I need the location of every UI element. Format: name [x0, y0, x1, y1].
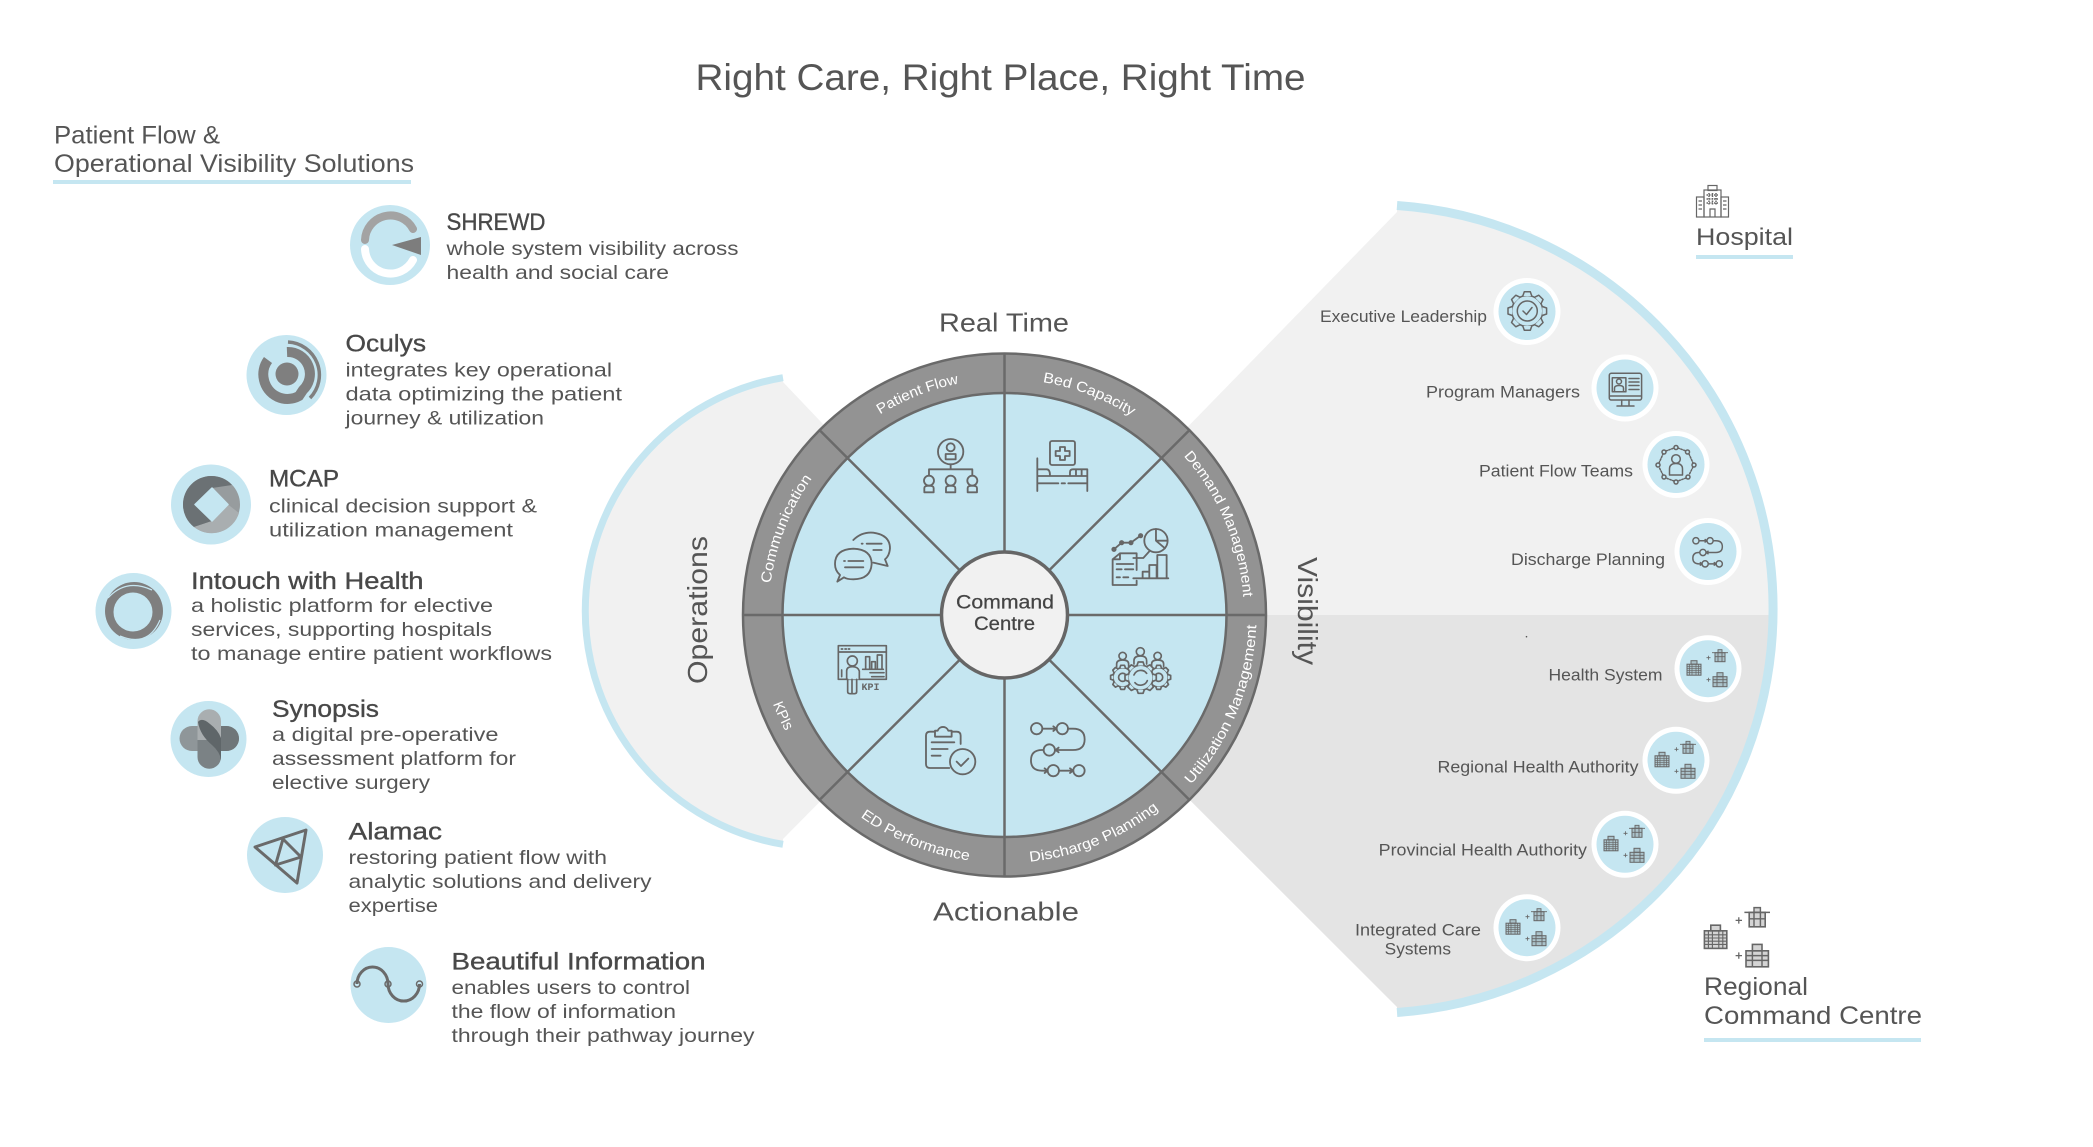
role: patient flow teams	[1479, 431, 1710, 498]
role: patient flow teams: Patient Flow Teams	[1479, 462, 1633, 481]
solution: Intouch with Health: services, supporting hospitals	[191, 619, 492, 641]
wheel: command centre	[742, 352, 1268, 878]
visibility arc	[1397, 206, 1773, 1012]
role: integrated care systems	[1355, 894, 1560, 961]
legend: regional command centre	[1704, 908, 1922, 1042]
solution: MCAP: MCAP	[269, 466, 339, 492]
segment label: discharge planning: Discharge Planning	[1030, 804, 1159, 862]
icon: hospital bed	[1037, 441, 1087, 491]
solution: MCAP	[171, 464, 537, 544]
solution: SHREWD: SHREWD	[446, 209, 546, 236]
role: provincial health authority	[1379, 811, 1658, 878]
segment label: bed capacity: Bed Capacity	[1044, 372, 1136, 416]
solution: Alamac: analytic solutions and delivery	[348, 871, 652, 893]
role: program managers: Program Managers	[1426, 383, 1580, 402]
role: program managers	[1426, 354, 1658, 422]
role: executive leadership	[1320, 278, 1560, 345]
solution: Intouch with Health	[96, 568, 552, 665]
segment label: communication: Communication	[761, 476, 812, 582]
solution: Beautiful Information: the flow of information	[452, 1001, 676, 1023]
role: health system: Health System	[1548, 666, 1662, 685]
solution: Beautiful Information: enables users to control	[452, 977, 690, 999]
solution: SHREWD: whole system visibility across	[445, 238, 739, 260]
segment label: utilization management: Utilization Management	[1184, 624, 1256, 782]
legend: hospital: Hospital	[1696, 224, 1793, 251]
solution: Synopsis: Synopsis	[272, 696, 379, 723]
label: operations: Operations	[682, 536, 713, 684]
heading: patient flow solutions: Operational Visibility Solutions	[54, 150, 414, 178]
solution: Oculys: Oculys	[346, 330, 426, 358]
icon: clipboard check	[926, 727, 975, 774]
role: integrated care systems: Integrated Care	[1355, 921, 1481, 940]
role: discharge planning: Discharge Planning	[1511, 550, 1665, 569]
icon: KPI presentation	[838, 646, 886, 694]
label: actionable: Actionable	[933, 897, 1079, 927]
heading: patient flow solutions: Patient Flow &	[54, 122, 220, 150]
solution: MCAP: clinical decision support &	[269, 496, 537, 518]
solution: Oculys	[246, 330, 623, 430]
solution: MCAP: utilization management	[269, 520, 514, 542]
role: provincial health authority: Provincial Health Authority	[1379, 841, 1588, 860]
label: visibility: Visibility	[1292, 557, 1323, 665]
hub: command centre	[942, 552, 1068, 678]
icon: org chart	[924, 439, 977, 492]
icon: team gears	[1111, 648, 1171, 693]
role: integrated care systems: Systems	[1385, 940, 1451, 958]
solution: Beautiful Information: through their pathway journey	[452, 1025, 755, 1047]
solution: SHREWD	[350, 205, 739, 285]
solution: Oculys: integrates key operational	[346, 360, 612, 382]
segment label: ED performance: ED Performance	[862, 809, 969, 860]
solution: Alamac: Alamac	[348, 818, 442, 846]
solution: Alamac: expertise	[348, 895, 438, 917]
solution: Intouch with Health: Intouch with Health	[191, 568, 424, 595]
solution: Oculys: data optimizing the patient	[346, 384, 623, 406]
segment label: patient flow: Patient Flow	[876, 376, 958, 414]
segment label: KPIs: KPIs	[773, 701, 792, 730]
title: Right Care, Right Place, Right Time	[696, 57, 1306, 98]
icon: discharge process	[1031, 723, 1085, 776]
solution: Synopsis: elective surgery	[272, 772, 430, 794]
role: regional health authority: Regional Health Authority	[1438, 758, 1639, 777]
legend: regional command centre: Command Centre	[1704, 1002, 1922, 1030]
solution: Beautiful Information: Beautiful Information	[452, 948, 706, 976]
role: health system	[1548, 635, 1742, 702]
solution: Intouch with Health: a holistic platform for elective	[191, 595, 493, 617]
icon: analytics report	[1112, 529, 1168, 585]
solution: Synopsis: assessment platform for	[272, 748, 517, 770]
solution: Synopsis: a digital pre-operative	[272, 724, 498, 746]
role: executive leadership: Executive Leadership	[1320, 307, 1487, 326]
icon: KPI caption: KPI	[862, 682, 880, 694]
solution: Synopsis	[170, 696, 517, 794]
role: regional health authority	[1438, 727, 1710, 794]
segment label: demand management: Demand Management	[1184, 450, 1253, 597]
hub: command centre: Centre	[974, 613, 1035, 635]
icon: chat bubbles	[835, 533, 890, 582]
solution: SHREWD: health and social care	[446, 262, 669, 284]
small speck	[1526, 636, 1527, 638]
label: real time: Real Time	[939, 308, 1069, 338]
panel: operations arc	[585, 378, 1004, 844]
legend: regional command centre: Regional	[1704, 973, 1808, 1001]
solution: Beautiful Information	[350, 947, 755, 1047]
solution: Oculys: journey & utilization	[344, 408, 544, 430]
heading: patient flow solutions	[53, 122, 414, 184]
hub: command centre: Command	[956, 592, 1054, 614]
panel: regional visibility, lower	[1004, 615, 1772, 1012]
solution: Alamac	[247, 817, 652, 917]
panel: hospital visibility, upper	[1004, 206, 1773, 615]
legend: hospital	[1696, 186, 1793, 259]
solution: Intouch with Health: to manage entire patient workflows	[191, 643, 552, 665]
role: discharge planning	[1511, 518, 1742, 585]
solution: Alamac: restoring patient flow with	[348, 847, 607, 869]
